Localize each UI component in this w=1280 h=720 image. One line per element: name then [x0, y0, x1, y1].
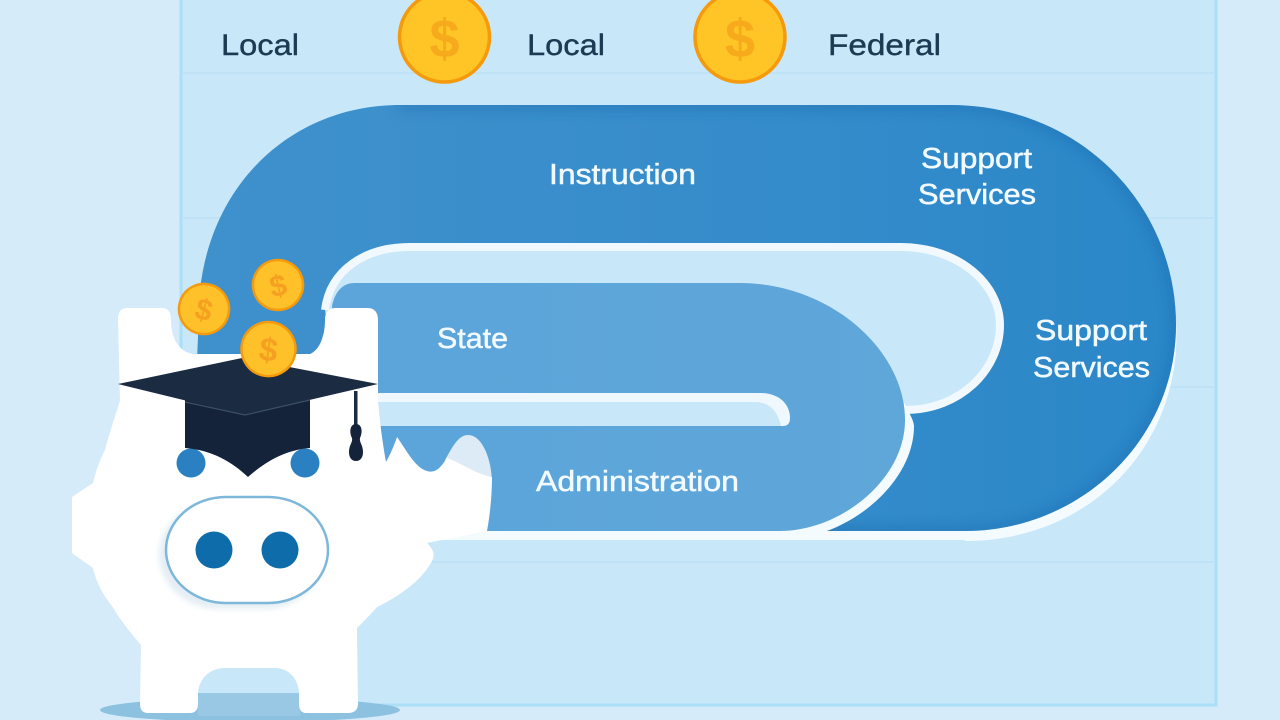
label: Support Services top: Services — [918, 179, 1036, 211]
band labels — [437, 143, 1150, 498]
label: Support Services right: Support — [1035, 315, 1147, 347]
icon: falling coin right — [248, 255, 308, 315]
label: Local: Local — [221, 29, 299, 62]
label: Support Services top — [918, 143, 1036, 211]
body silhouette — [72, 308, 492, 713]
cap tassel — [349, 391, 363, 461]
notch between bands — [370, 393, 790, 426]
label: State: State — [437, 323, 508, 355]
icon: coin 1 — [400, 0, 490, 82]
snout — [159, 497, 328, 609]
eyes — [176, 448, 320, 478]
icon: falling coin right: $ — [267, 269, 290, 304]
medium blue band — [332, 283, 985, 540]
label: Local second: Local — [527, 29, 605, 62]
label: Administration: Administration — [536, 466, 739, 498]
outer blue band — [197, 105, 1176, 541]
background panel — [181, 0, 1216, 705]
label: Instruction: Instruction — [549, 159, 696, 191]
icon: coin 2: $ — [725, 9, 755, 69]
top row labels and coins — [221, 0, 941, 82]
pale drip bubble — [445, 435, 492, 480]
icon: falling coin centre — [238, 319, 299, 380]
icon: graduation cap — [118, 358, 378, 477]
icon: coin 2 — [695, 0, 785, 82]
icon: falling coin left: $ — [191, 292, 216, 329]
light inner gap with white outline — [325, 247, 1000, 410]
gap under belly — [198, 668, 300, 716]
pig bank — [72, 255, 492, 720]
icon: falling coin left — [173, 278, 235, 340]
ground shadow — [100, 698, 400, 720]
label: Support Services right: Services — [1033, 352, 1150, 384]
label: Support Services top: Support — [921, 143, 1032, 175]
label: Support Services right — [1033, 315, 1150, 384]
label: Federal: Federal — [828, 29, 941, 62]
icon: coin 1: $ — [429, 9, 460, 69]
icon: falling coin centre: $ — [257, 330, 280, 369]
